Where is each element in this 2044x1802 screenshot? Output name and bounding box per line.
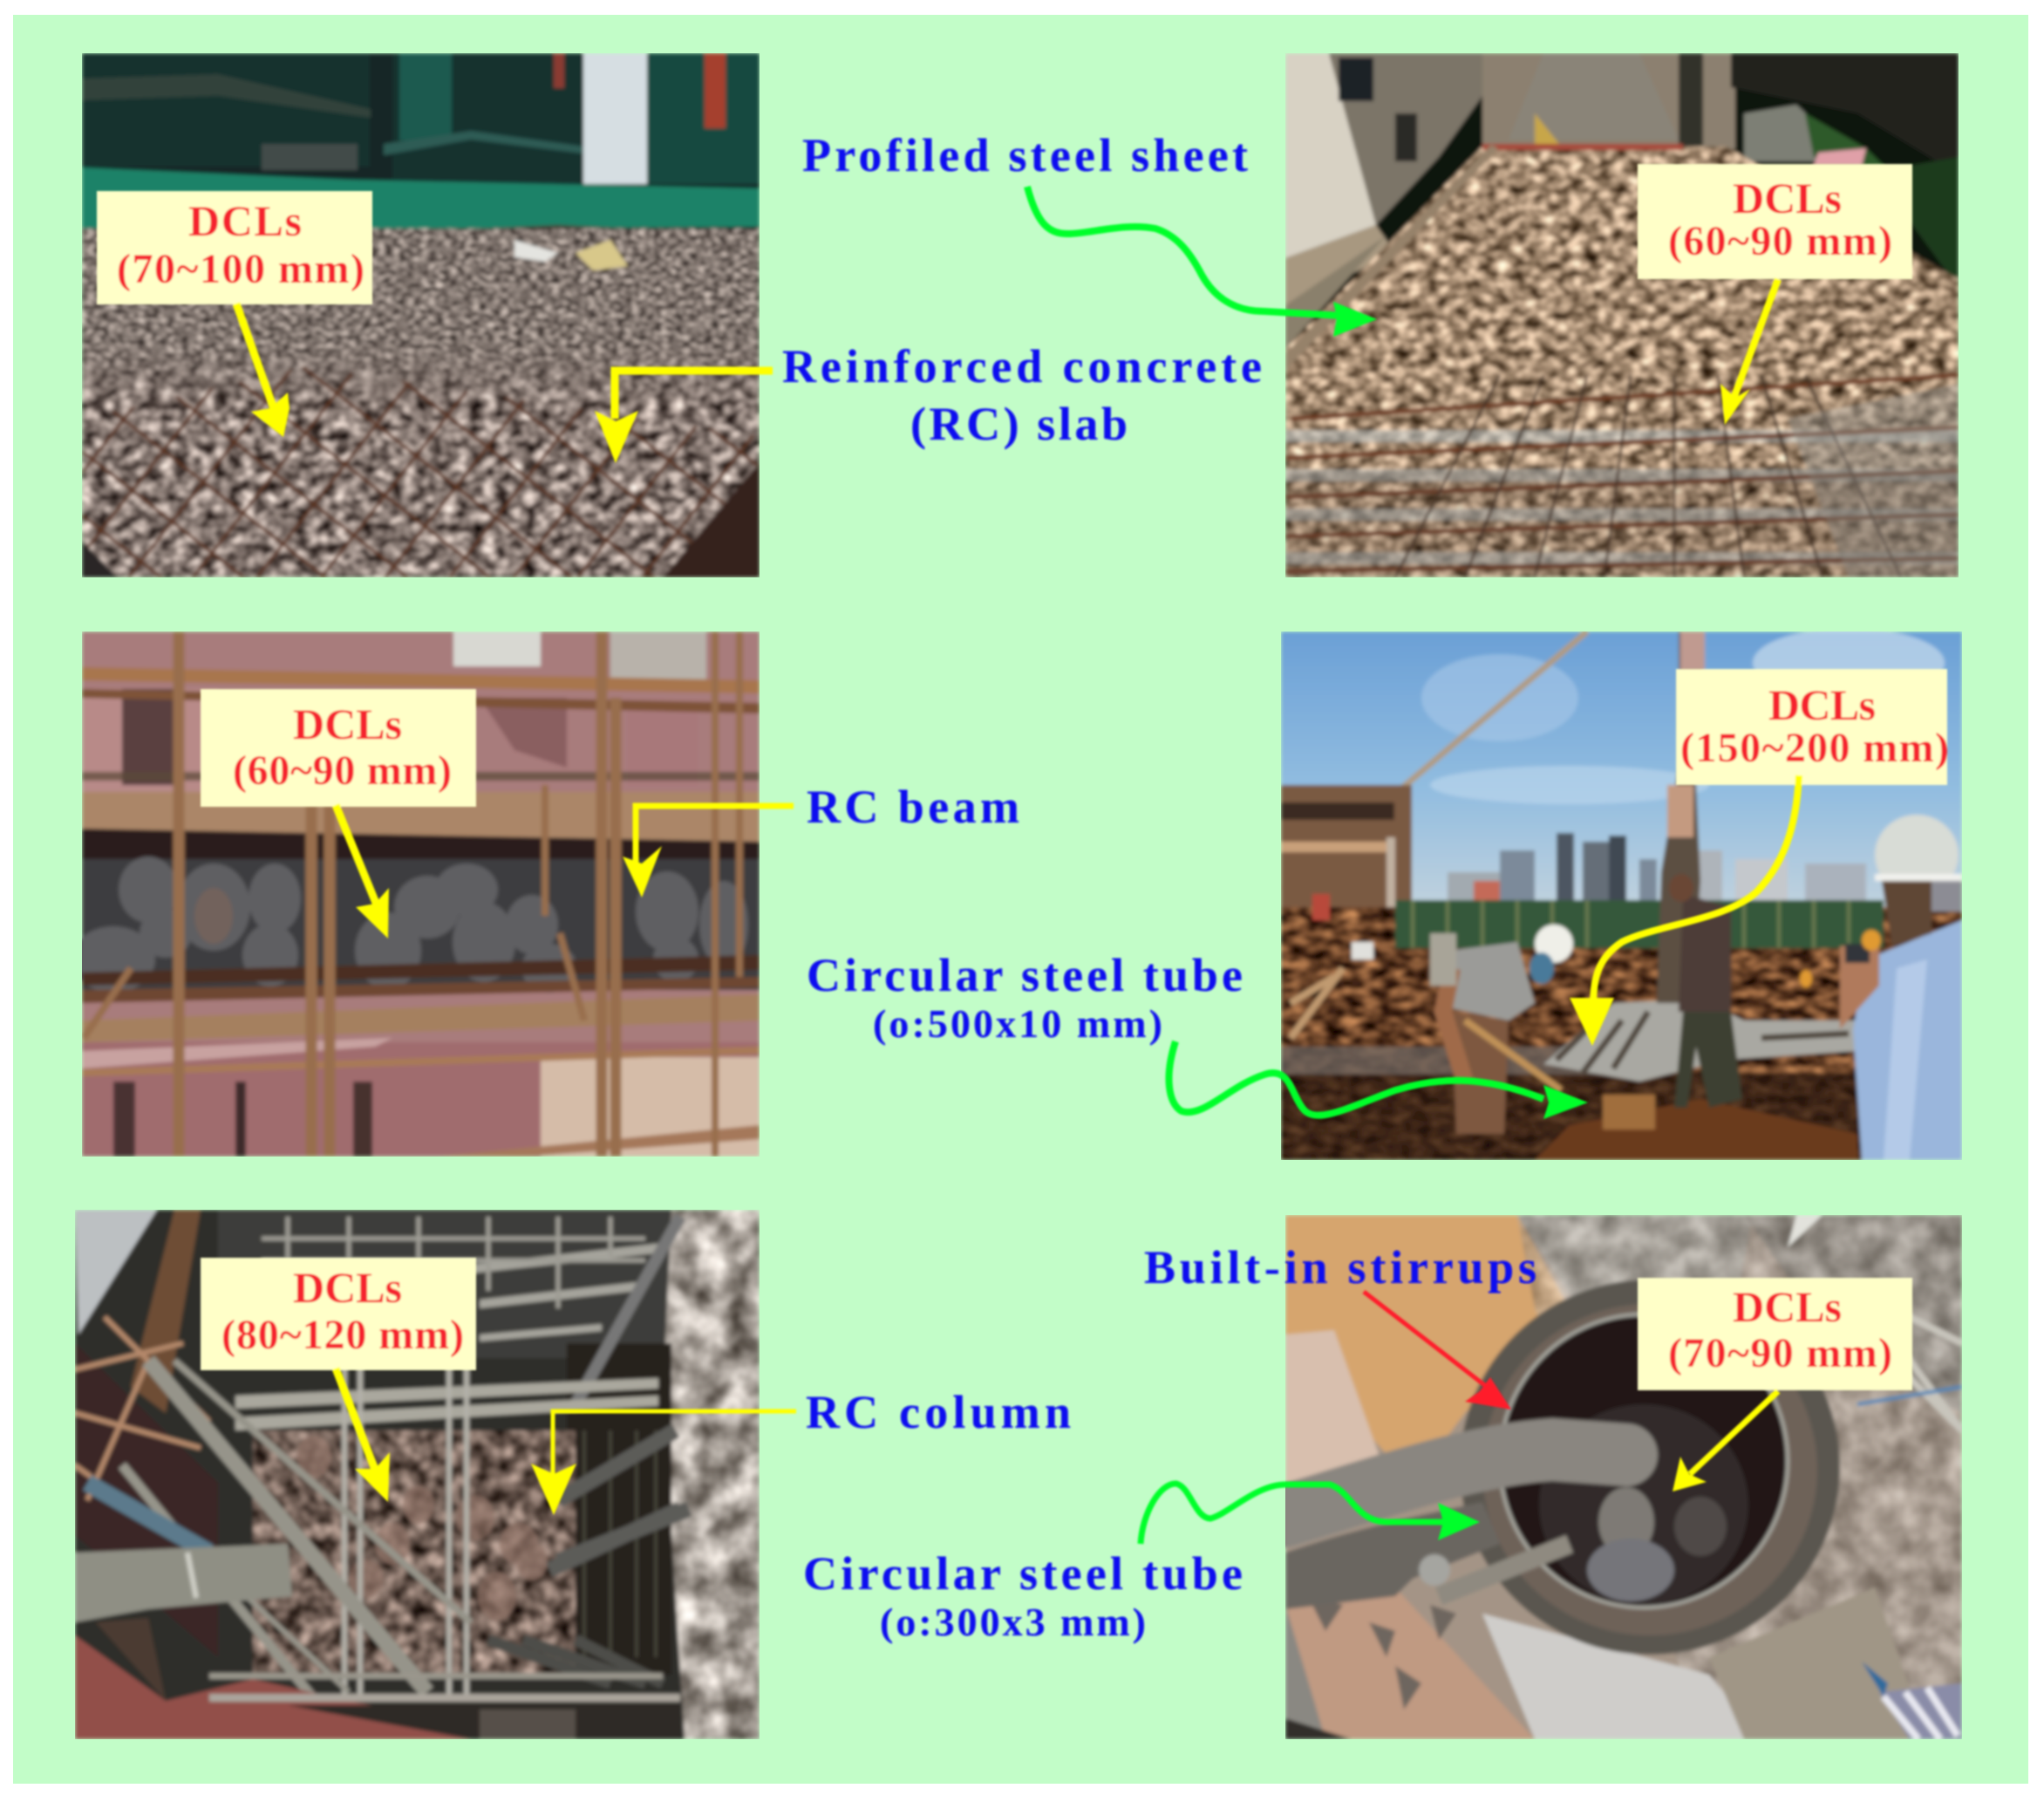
callout: DCLs 60~90 mm slab: DCLs	[1733, 174, 1842, 222]
label: Circular steel tube 500: Circular steel tube	[807, 949, 1243, 1001]
callout: DCLs 80~120 mm: DCLs	[293, 1263, 402, 1312]
label: tube size 500x10: (o:500x10 mm)	[873, 1001, 1162, 1046]
label: Reinforced concrete: Reinforced concrete	[782, 340, 1262, 392]
arrow: RC beam	[623, 806, 794, 898]
callout: DCLs 80~120 mm	[201, 1258, 476, 1370]
label: Built-in stirrups: Built-in stirrups	[1144, 1241, 1536, 1293]
callout: DCLs 60~90 mm slab: (60~90 mm)	[1668, 218, 1892, 264]
arrow: DCLs to tube interior	[1673, 1391, 1778, 1491]
callout: DCLs 70~90 mm: DCLs	[1733, 1282, 1842, 1331]
arrow: circular steel tube 500	[1169, 1041, 1588, 1119]
arrow: DCLs to deck	[1720, 279, 1778, 425]
callout: DCLs 60~90 mm beam	[201, 689, 476, 807]
photo: RC column cage	[75, 1210, 760, 1739]
label: tube size 300x3: (o:300x3 mm)	[880, 1600, 1146, 1644]
photo: RC beam reinforcing cage	[72, 631, 760, 1157]
photo: profiled steel sheet deck	[1285, 53, 1959, 577]
arrow: DCLs to beam stones	[336, 805, 389, 939]
callout: DCLs 70~90 mm: (70~90 mm)	[1668, 1330, 1892, 1376]
label: RC beam: RC beam	[807, 781, 1019, 833]
callout: DCLs 70~100 mm: (70~100 mm)	[117, 246, 365, 292]
label: RC column: RC column	[806, 1386, 1071, 1438]
arrow: DCLs to slab rubble	[236, 304, 290, 437]
arrow: DCLs to pump pile	[1570, 775, 1799, 1046]
arrow: RC slab	[595, 371, 773, 463]
arrow: RC column	[531, 1411, 796, 1515]
arrow: DCLs to column rubble	[336, 1369, 390, 1502]
arrow: circular steel tube 300	[1141, 1484, 1480, 1544]
callout: DCLs 70~90 mm	[1638, 1278, 1912, 1390]
photo: circular steel tube top view	[1285, 1215, 1962, 1739]
label: Profiled steel sheet: Profiled steel sheet	[802, 129, 1248, 181]
callout: DCLs 150~200 mm: (150~200 mm)	[1680, 725, 1949, 771]
photo: RC slab rubble	[82, 53, 760, 577]
arrow: built-in stirrups	[1364, 1292, 1511, 1410]
callout: DCLs 150~200 mm: DCLs	[1768, 680, 1876, 729]
callout: DCLs 60~90 mm beam: DCLs	[293, 700, 402, 748]
labels and arrows overlay	[97, 129, 1949, 1644]
callout: DCLs 80~120 mm: (80~120 mm)	[221, 1312, 464, 1358]
callout: DCLs 70~100 mm: DCLs	[188, 196, 302, 245]
callout: DCLs 70~100 mm	[97, 191, 372, 304]
photo: concrete pumping over tube	[1281, 628, 1962, 1160]
label: (RC) slab: (RC) slab	[910, 398, 1128, 450]
arrow: profiled steel sheet	[1027, 187, 1377, 337]
callout: DCLs 60~90 mm slab	[1638, 164, 1912, 279]
callout: DCLs 60~90 mm beam: (60~90 mm)	[233, 747, 452, 794]
callout: DCLs 150~200 mm	[1676, 669, 1949, 785]
label: Circular steel tube 300: Circular steel tube	[803, 1547, 1243, 1600]
